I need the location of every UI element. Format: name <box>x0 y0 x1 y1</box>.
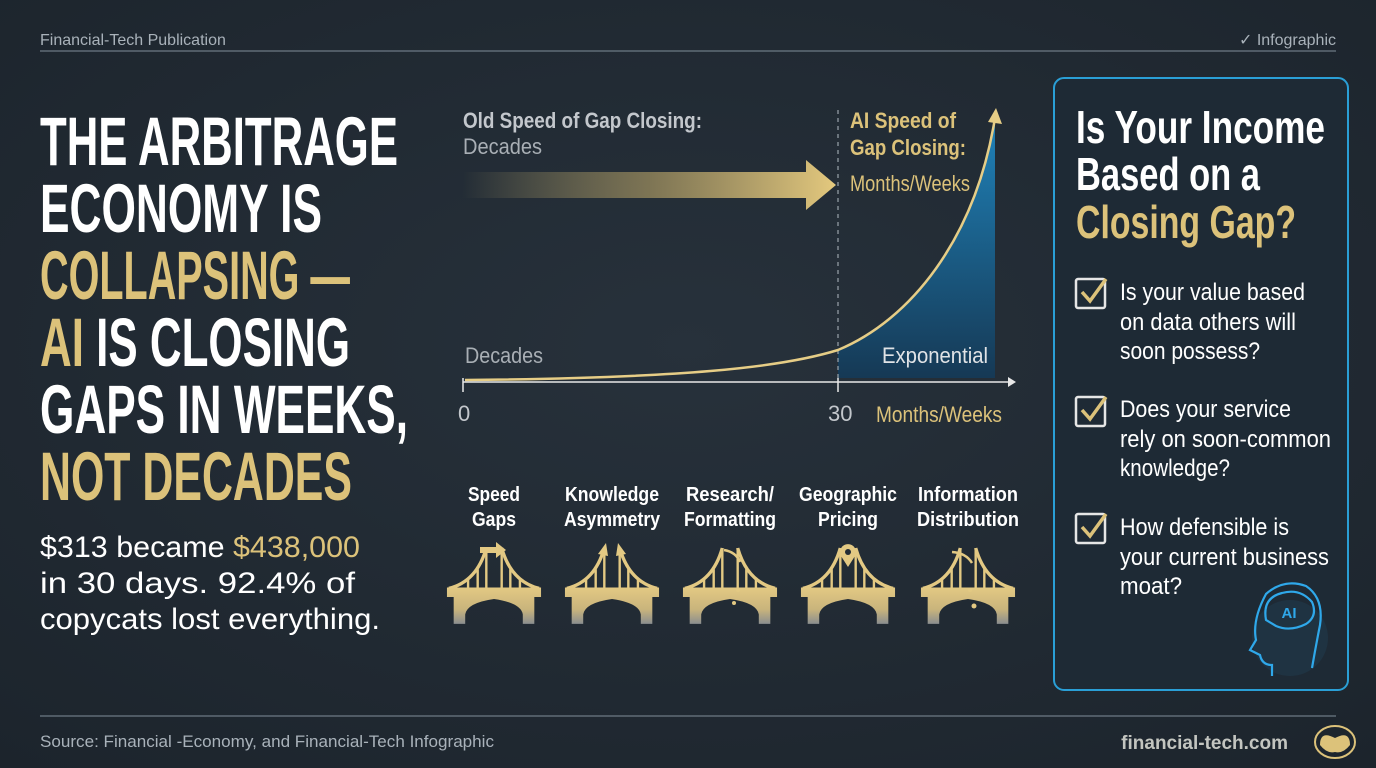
checklist item 2: Does your service <box>1120 396 1291 423</box>
title: NOT DECADES <box>40 438 352 515</box>
bridge: information distribution: Distribution <box>917 509 1019 531</box>
bridge: geographic pricing: Geographic <box>799 484 897 506</box>
exponential blue area <box>838 118 995 378</box>
bridge: research/formatting <box>683 484 777 624</box>
checklist item 3 <box>1076 514 1329 600</box>
bridge: speed gaps: Gaps <box>472 509 516 531</box>
axis <box>463 377 1016 392</box>
bridge: information distribution: Information <box>918 484 1018 506</box>
axis labels <box>458 343 1002 427</box>
bridge: research/formatting: Research/ <box>686 484 774 506</box>
footer <box>40 716 1355 758</box>
chart: speed comparison <box>458 108 1016 427</box>
arrow: old speed <box>463 160 836 210</box>
footer source: Source: Financial -Economy, and Financial-Tech Infographic <box>40 732 494 751</box>
footer site: financial-tech.com <box>1121 733 1288 754</box>
panel: income check <box>1054 78 1348 690</box>
checklist item 1 <box>1076 279 1305 365</box>
checklist item 2 <box>1076 396 1331 482</box>
AI speed label: Months/Weeks <box>850 171 970 196</box>
old speed label <box>463 108 702 159</box>
axis labels: Exponential <box>882 343 988 368</box>
checklist item 2: rely on soon-common <box>1120 426 1331 453</box>
title: COLLAPSING — <box>40 237 350 314</box>
checklist item 1: on data others will <box>1120 309 1296 336</box>
subtitle stat text: copycats lost everything. <box>40 603 380 636</box>
checklist item 1: soon possess? <box>1120 338 1260 365</box>
AI speed label: AI Speed of <box>850 108 957 133</box>
icon: AI head: AI <box>1282 605 1296 622</box>
subtitle stat text <box>40 531 380 636</box>
checklist item 3: moat? <box>1120 573 1182 600</box>
bridge: geographic pricing: Pricing <box>818 509 878 531</box>
bridge: knowledge asymmetry: Asymmetry <box>564 509 661 531</box>
bridge gap types row <box>447 484 1019 624</box>
icon: AI head <box>1250 583 1328 676</box>
checklist item 1: Is your value based <box>1120 279 1305 306</box>
axis labels: 30 <box>828 401 852 426</box>
old speed label: Decades <box>463 134 542 159</box>
bridge: speed gaps: Speed <box>468 484 520 506</box>
icon: logo <box>1315 726 1355 758</box>
subtitle stat text: $313 became $438,000 <box>40 531 360 564</box>
title <box>40 103 408 515</box>
AI speed label <box>850 108 970 196</box>
header: publication: Financial-Tech Publication <box>40 32 226 49</box>
panel heading <box>1076 101 1325 248</box>
checklist item 3: How defensible is <box>1120 514 1289 541</box>
title: GAPS IN WEEKS, <box>40 371 408 448</box>
curve <box>465 118 995 380</box>
bridge: speed gaps <box>447 484 541 624</box>
axis labels: 0 <box>458 401 470 426</box>
axis labels: Decades <box>465 343 543 368</box>
bridge: geographic pricing <box>799 484 897 624</box>
bridge: information distribution <box>917 484 1019 624</box>
checklist item 2: knowledge? <box>1120 455 1230 482</box>
AI speed label: Gap Closing: <box>850 135 966 160</box>
header: infographic tag: ✓ Infographic <box>1239 32 1336 49</box>
title: THE ARBITRAGE <box>40 103 398 180</box>
subtitle stat text: in 30 days. 92.4% of <box>40 567 356 600</box>
bridge: research/formatting: Formatting <box>684 509 776 531</box>
title: ECONOMY IS <box>40 170 322 247</box>
axis labels: Months/Weeks <box>876 402 1002 427</box>
dashed divider <box>837 110 839 380</box>
bridge: knowledge asymmetry: Knowledge <box>565 484 659 506</box>
panel heading: Based on a <box>1076 148 1260 200</box>
checklist item 3: your current business <box>1120 544 1329 571</box>
bridge: knowledge asymmetry <box>564 484 661 624</box>
title: AI IS CLOSING <box>40 304 350 381</box>
old speed label: Old Speed of Gap Closing: <box>463 108 702 133</box>
panel heading: Closing Gap? <box>1076 196 1296 248</box>
